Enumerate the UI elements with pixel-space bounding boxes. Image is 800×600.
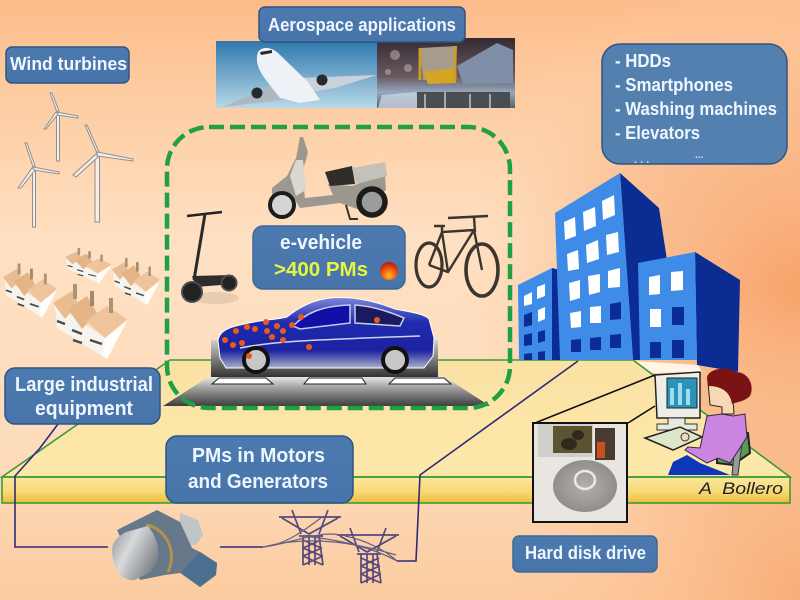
car platform <box>163 376 490 406</box>
label: hard disk drive <box>513 536 657 572</box>
icon: magnet dot legend <box>380 262 398 280</box>
head and hair <box>708 380 734 414</box>
car wheels <box>244 348 407 372</box>
label: large industrial equipment: equipment <box>35 398 133 420</box>
hand <box>681 433 689 441</box>
turbine 1 <box>44 93 78 161</box>
credit: A Bollero: A Bollero <box>698 479 783 498</box>
monitor <box>645 372 702 450</box>
icon: wind turbines <box>18 93 133 227</box>
turbine 2 <box>18 143 59 227</box>
label: aerospace applications: Aerospace applications <box>268 15 456 35</box>
chair <box>717 433 750 475</box>
photo: airplane <box>216 41 377 108</box>
building: center <box>555 173 675 360</box>
label: e-vehicle: e-vehicle <box>280 232 362 254</box>
dashed frame <box>167 127 510 408</box>
label: device list: - Smartphones <box>615 75 733 95</box>
label: device list: - Elevators <box>615 123 700 143</box>
label: device list: - Washing machines <box>615 99 777 119</box>
label: PMs in motors and generators: PMs in Motors <box>192 445 325 467</box>
icon: e-bike <box>416 216 498 296</box>
label: wind turbines: Wind turbines <box>10 54 127 74</box>
building: right <box>638 252 740 372</box>
label: large industrial equipment: Large industrial <box>15 374 153 396</box>
icon: factories <box>3 248 160 359</box>
label: large industrial equipment <box>5 368 160 424</box>
skirt <box>668 455 730 475</box>
label: e-vehicle: >400 PMs <box>274 259 368 281</box>
photo: spacecraft <box>377 38 515 108</box>
zoom lines to disk <box>535 375 655 423</box>
icon: electric car <box>211 297 438 377</box>
torso and arm <box>685 414 747 463</box>
icon: power line towers <box>263 510 399 583</box>
label: aerospace applications <box>259 7 465 42</box>
label: e-vehicle <box>253 226 405 289</box>
icon: buildings <box>518 173 740 372</box>
magnet dots <box>222 314 380 359</box>
dashed e-vehicle frame and car platform <box>163 127 510 408</box>
connector lines <box>15 361 578 561</box>
platform floor <box>2 360 790 503</box>
label: device list: ... <box>695 150 704 161</box>
photo: hard disk drive <box>533 423 627 522</box>
label: device list: . . . <box>634 154 649 166</box>
turbine 3 <box>73 125 133 222</box>
label: hard disk drive: Hard disk drive <box>525 543 646 563</box>
label: wind turbines <box>6 47 129 83</box>
label: device list <box>602 44 787 166</box>
building: left <box>518 268 563 360</box>
label: device list: - HDDs <box>615 51 671 71</box>
icon: woman at computer <box>645 369 752 475</box>
icon: motor <box>112 510 217 587</box>
icon: e-scooter <box>182 212 239 304</box>
icon: motor scooter <box>270 137 387 219</box>
label: PMs in motors and generators: and Generators <box>188 471 328 493</box>
label: PMs in motors and generators <box>166 436 353 503</box>
